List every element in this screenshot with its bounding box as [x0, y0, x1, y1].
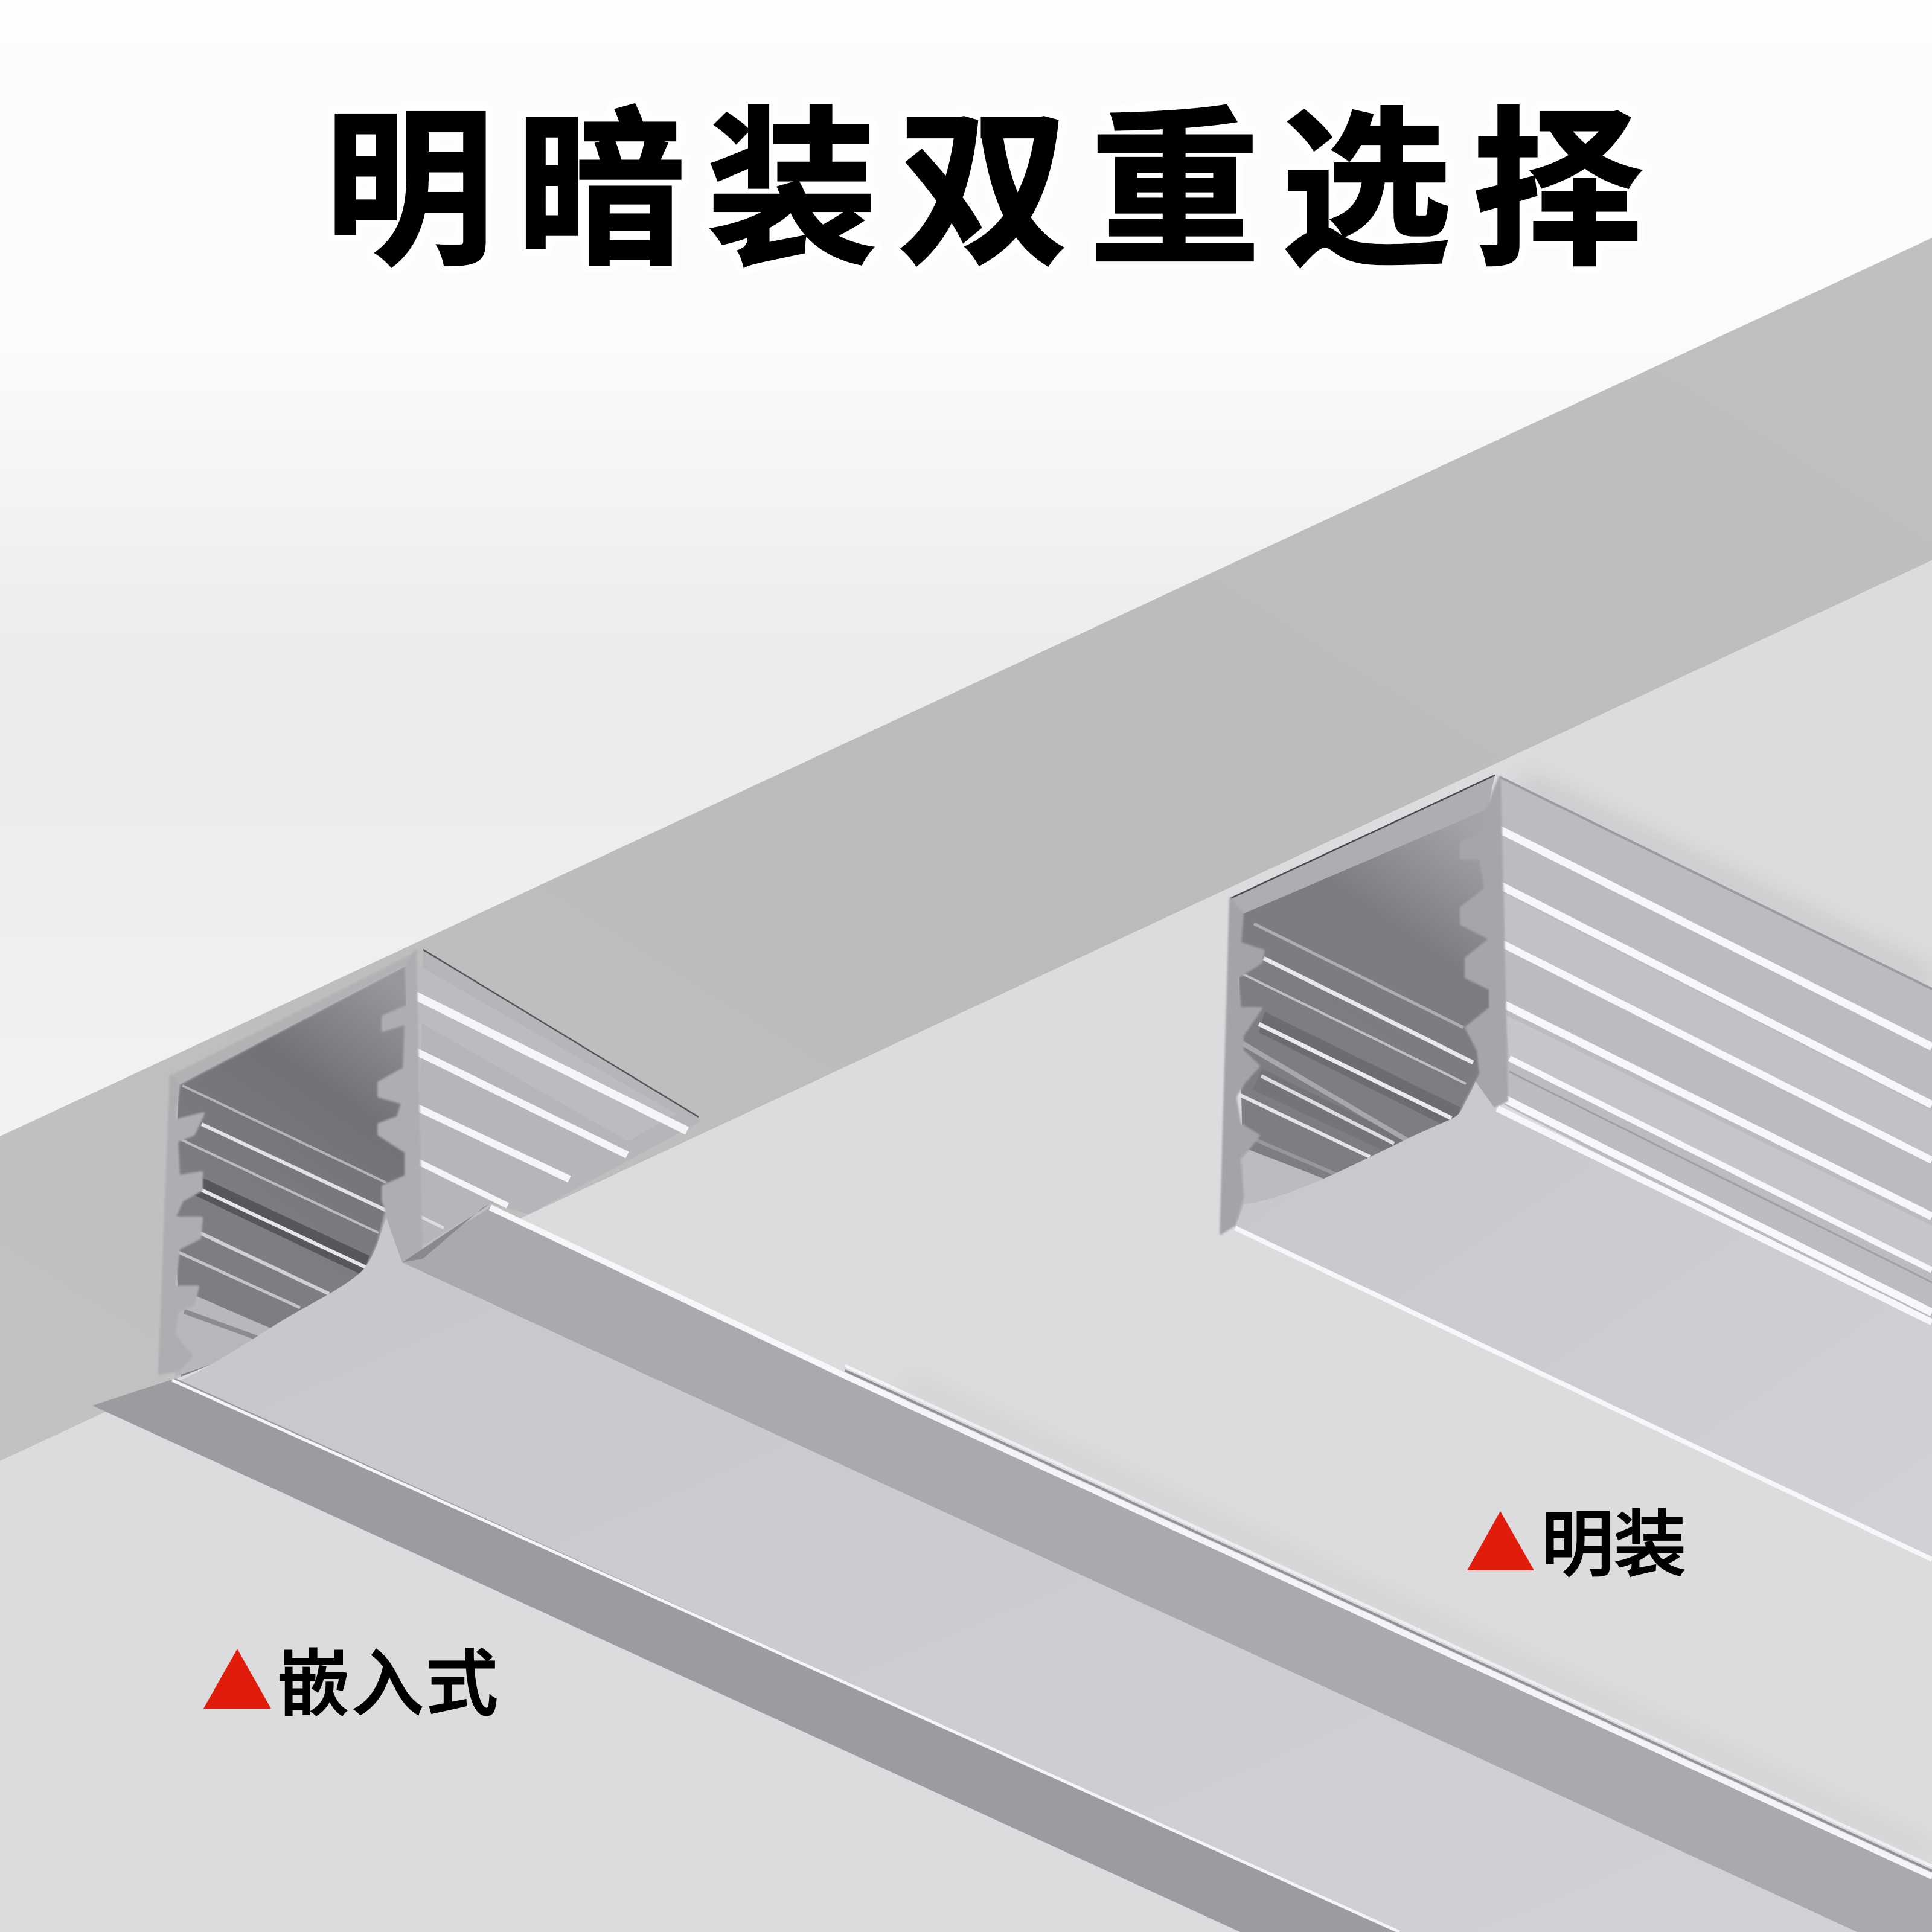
panel: surface-mounted channel: [1221, 775, 1932, 1559]
icon: red triangle: [1467, 1511, 1534, 1570]
soft shadow above double line: [906, 1383, 1932, 1854]
surface channel ribbed right wall: [1497, 777, 1932, 1328]
recessed channel left scalloped frame: [159, 1075, 203, 1374]
label text: 嵌入式: [277, 1644, 500, 1725]
recessed channel ribbed right wall: [415, 950, 702, 1250]
surface channel shadow: [1521, 782, 1932, 981]
label: surface mounted: [1467, 1505, 1686, 1585]
surface channel dark inner wall: [1235, 809, 1491, 1220]
ceiling beam face: [0, 238, 1932, 1461]
surface channel left scalloped frame: [1221, 898, 1264, 1233]
surface channel top edge: [1230, 775, 1495, 914]
surface channel floor panel: [1235, 1081, 1932, 1559]
recessed channel centre scalloped frame: [367, 951, 421, 1270]
recessed channel floor panel: [176, 1218, 1857, 1932]
recessed channel lower shadow band: [92, 1378, 1399, 1932]
panel: recessed channel: [92, 949, 1932, 1932]
recessed channel dark inner wall: [174, 966, 408, 1377]
label text: 明装: [1541, 1505, 1686, 1585]
surface channel centre scalloped frame: [1461, 777, 1507, 1112]
ceiling surface: [0, 560, 1932, 1932]
recessed channel upper band: [402, 1208, 1932, 1932]
recessed channel top edge: [171, 949, 421, 1086]
label: embedded: [203, 1644, 500, 1725]
icon: red triangle: [203, 1649, 271, 1709]
title: 明暗装双重选择: [324, 96, 1664, 286]
